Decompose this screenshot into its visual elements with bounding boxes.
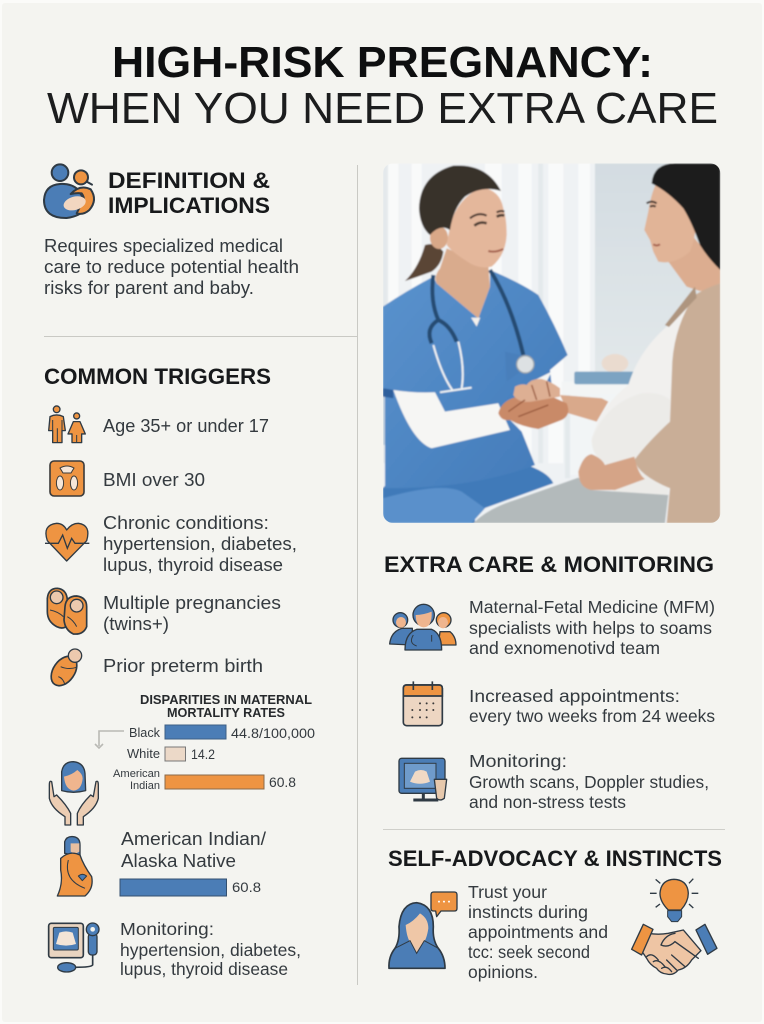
text: [120, 919, 301, 979]
bar chart: 14.2: [191, 746, 215, 762]
panel: extra care and monitoring: [384, 552, 715, 812]
bar chart: 60.8: [269, 774, 296, 790]
panel: self-advocacy and instincts: [388, 846, 722, 982]
text: MFM specialists: specialists with helps to soams: [469, 618, 712, 638]
text block: care to reduce potential health: [44, 257, 299, 277]
trigger: chronic conditions: Chronic conditions:: [103, 513, 269, 533]
text: monitoring: [469, 751, 709, 812]
text: hypertension, diabetes,: [120, 940, 301, 960]
text: lupus, thyroid disease: [120, 959, 288, 979]
icon: handshake: [632, 924, 717, 974]
text: tcc: seek second: [468, 942, 590, 962]
text: monitoring: Monitoring:: [469, 751, 567, 771]
chart title: MORTALITY RATES: [167, 706, 285, 720]
trigger: multiple pregnancies: [103, 593, 281, 634]
panel: monitoring (left): [49, 919, 301, 979]
heading: DEFINITION &: [108, 168, 270, 193]
text: Alaska Native: [121, 851, 236, 871]
bar chart: Black: [129, 725, 160, 740]
trigger: multiple pregnancies: Multiple pregnancies: [103, 593, 281, 613]
text: appointments and: [468, 922, 608, 942]
heading: IMPLICATIONS: [108, 193, 270, 218]
heading: [108, 168, 270, 218]
trigger: chronic conditions: [103, 513, 297, 575]
icon: ultrasound machine: [49, 923, 99, 972]
panel: definition and implications: [44, 164, 299, 298]
text: Monitoring:: [120, 919, 214, 939]
icon: parent and baby: [44, 164, 94, 218]
text: [468, 882, 608, 982]
photo: nurse holding pregnant patient's hand: [383, 163, 720, 523]
text block: [44, 236, 299, 298]
heading: EXTRA CARE & MONITORING: [384, 552, 714, 577]
text block: Requires specialized medical: [44, 236, 283, 256]
chart title: [140, 693, 312, 720]
trigger: age: Age 35+ or under 17: [103, 416, 269, 436]
bar chart: Indian: [130, 780, 160, 792]
trigger: chronic conditions: hypertension, diabetes,: [103, 534, 297, 554]
text: Trust your: [468, 882, 547, 902]
icon: light bulb: [650, 879, 698, 922]
bar: [120, 879, 226, 896]
title: WHEN YOU NEED EXTRA CARE: [47, 84, 718, 133]
text: instincts during: [468, 902, 588, 922]
text: monitoring: Growth scans, Doppler studies,: [469, 772, 709, 792]
panel: disparities chart: [49, 693, 315, 825]
icon: woman speaking: [389, 892, 457, 968]
clasped hands: [498, 379, 568, 429]
icon: woman in caring hands: [49, 762, 98, 825]
arrow: [95, 731, 124, 748]
value: 60.8: [232, 879, 261, 895]
heading: SELF-ADVOCACY & INSTINCTS: [388, 846, 722, 871]
icon: ultrasound monitor: [399, 758, 447, 800]
panel: common triggers: [44, 364, 297, 690]
trigger: preterm birth: Prior preterm birth: [103, 656, 263, 676]
text: MFM specialists: Maternal-Fetal Medicine (MFM): [469, 597, 715, 617]
trigger: chronic conditions: lupus, thyroid disease: [103, 555, 283, 575]
text block: risks for parent and baby.: [44, 278, 254, 298]
trigger: BMI: BMI over 30: [103, 470, 205, 490]
trigger: multiple pregnancies: (twins+): [103, 614, 169, 634]
icon: adult and child: [49, 406, 85, 443]
text: monitoring: and non-stress tests: [469, 792, 626, 812]
icon: twin babies: [47, 588, 87, 634]
text: opinions.: [468, 962, 538, 982]
title: HIGH-RISK PREGNANCY:: [112, 38, 653, 87]
nurse: [383, 165, 568, 523]
title: [47, 38, 718, 133]
bar chart: White: [127, 746, 160, 761]
text: appointments: every two weeks from 24 weeks: [469, 706, 715, 726]
text: American Indian/: [121, 829, 266, 849]
text: MFM specialists: [469, 597, 715, 658]
patient: [473, 163, 720, 523]
text: appointments: [469, 686, 715, 726]
bar chart: American: [113, 768, 160, 780]
bar chart: [113, 725, 315, 792]
heading: COMMON TRIGGERS: [44, 364, 271, 389]
icon: care team: [390, 604, 456, 650]
chart title: DISPARITIES IN MATERNAL: [140, 693, 312, 707]
bar chart: 44.8/100,000: [231, 725, 315, 741]
icon: pregnant woman: [57, 837, 92, 896]
icon: newborn: [46, 649, 82, 690]
text: MFM specialists: and exnomenotivd team: [469, 638, 660, 658]
panel: American Indian/Alaska Native: [57, 829, 266, 896]
icon: calendar: [403, 681, 442, 726]
text: [121, 829, 266, 871]
text: appointments: Increased appointments:: [469, 686, 680, 706]
icon: scale: [50, 461, 84, 496]
icon: heart with pulse: [45, 523, 89, 561]
